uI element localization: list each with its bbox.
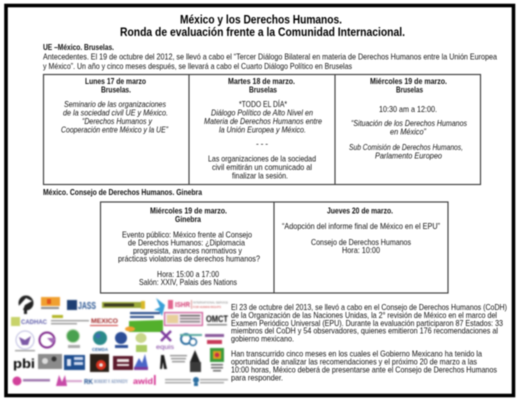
cell: Miércoles 19 de marzo Bruselas: “Situación de los Derechos Humanos xyxy=(351,118,468,128)
logo: JASS: JASS xyxy=(78,301,96,312)
cell: Miércoles 19 de marzo Ginebra: Miércoles 19 de marzo. xyxy=(150,206,227,216)
cell: Miércoles 19 de marzo Ginebra: progresista, avances normativos y xyxy=(133,246,243,256)
cell: Miércoles 19 de marzo Ginebra: de Derechos Humanos: ¿Diplomacia xyxy=(128,238,245,248)
cell: Martes 18 de marzo: *TODO EL DÍA* xyxy=(239,99,288,109)
text block: EPU summary: oportunidad de analizar las recomendaciones y el próximo 20 de marzo a las xyxy=(231,356,477,366)
logo: CIHE green seal xyxy=(66,330,80,348)
logo: CADHAC: CADHAC xyxy=(21,319,47,326)
logo: blue panel xyxy=(64,355,85,370)
logo: CADHAC xyxy=(11,317,47,326)
logo: Pooch xyxy=(41,297,60,309)
logo: ISHR xyxy=(168,300,228,309)
logo: blue circles xyxy=(180,334,202,346)
logo: green circle xyxy=(136,333,147,352)
logo: equis xyxy=(156,331,175,351)
cell: Miércoles 19 de marzo Ginebra: Salón: XXIV, Palais des Nations xyxy=(139,277,237,287)
cell: Miércoles 19 de marzo Bruselas: Parlamento Europeo xyxy=(375,150,442,160)
logo: Robert F. Kennedy: ROBERT F. KENNEDY xyxy=(94,380,128,385)
cell: Miércoles 19 de marzo Bruselas: en México” xyxy=(390,126,427,136)
logo: magenta crescent xyxy=(40,332,56,348)
logo: CEMDA: CEMDA xyxy=(92,347,109,352)
cell: Martes 18 de marzo: Martes 18 de marzo. xyxy=(228,76,295,86)
cell: Lunes 17 de marzo: Cooperación entre México y la UE” xyxy=(61,124,169,134)
text block: EPU summary: Han transcurrido cinco meses en los cuales el Gobierno Mexicano ha tenido la xyxy=(231,348,482,358)
logo: magenta wave xyxy=(56,375,82,386)
cell: Miércoles 19 de marzo Bruselas: Miércoles 19 de marzo. xyxy=(370,76,447,86)
logo: globe and dove xyxy=(17,296,34,314)
logo: pink mujeres xyxy=(12,376,50,386)
logo: OMCT: OMCT xyxy=(206,313,228,324)
logo: blue circle xyxy=(115,332,128,348)
logo: JASS xyxy=(67,300,96,312)
logo: Robert F. Kennedy: RK xyxy=(84,379,93,386)
cell: Miércoles 19 de marzo Ginebra: Ginebra xyxy=(175,214,201,224)
logo: Robert F. Kennedy xyxy=(84,379,128,386)
cell: Miércoles 19 de marzo Ginebra xyxy=(118,206,260,287)
cell: Martes 18 de marzo: Las organizaciones de la sociedad xyxy=(208,154,316,164)
logo: green patterned box xyxy=(210,348,224,372)
logo: pink red text xyxy=(205,334,224,344)
logo: CEMDA xyxy=(92,331,109,352)
cell: Martes 18 de marzo xyxy=(204,76,322,180)
cell: Martes 18 de marzo: Diálogo Político de Alto Nivel en xyxy=(211,108,313,118)
logo: pink framed box xyxy=(164,312,202,326)
title xyxy=(120,12,405,39)
cell: Martes 18 de marzo: Materia de Derechos Humanos entre xyxy=(204,116,322,126)
logo: yellow-green institute xyxy=(51,315,89,324)
cell: Martes 18 de marzo: civil emitirán un comunicado al xyxy=(212,162,312,172)
logo: equis: equis xyxy=(156,344,175,351)
section: UE-México background text xyxy=(43,42,497,71)
cell: Miércoles 19 de marzo Bruselas xyxy=(349,76,468,160)
logo: ISHR: ISHR xyxy=(175,302,190,309)
logo: blue bird xyxy=(154,298,165,316)
cell: Miércoles 19 de marzo Bruselas: Sub Comisión de Derechos Humanos, xyxy=(349,142,463,152)
cell: Miércoles 19 de marzo Ginebra: Hora: 15:00 a 17:00 xyxy=(157,269,219,279)
cell: Lunes 17 de marzo: de la sociedad civil UE y México. xyxy=(63,108,168,118)
cell: Jueves 20 de marzo xyxy=(282,206,440,255)
logo: awid: awid xyxy=(133,376,153,386)
cell: Miércoles 19 de marzo Ginebra: prácticas violatorias de derechos humanos? xyxy=(118,254,260,264)
section heading: Ginebra: México. Consejo de Derechos Humanos. Ginebra xyxy=(43,187,202,197)
logo: black triangle xyxy=(190,350,201,372)
table: Bruselas agenda xyxy=(44,74,480,184)
cell: Jueves 20 de marzo: Jueves 20 de marzo. xyxy=(327,206,393,216)
cell: Miércoles 19 de marzo Bruselas: Bruselas xyxy=(396,84,423,94)
logo: dark panel with red circle xyxy=(90,354,109,372)
cell: Lunes 17 de marzo: “Derechos Humanos y xyxy=(82,116,153,126)
logo: ISHR: FOR HUMAN RIGHTS xyxy=(193,305,221,309)
cell: Martes 18 de marzo: Bruselas xyxy=(249,84,277,94)
cell: Jueves 20 de marzo: Consejo de Derechos Humanos xyxy=(311,237,411,247)
logo: Fr. Francisco de Vitoria xyxy=(125,312,163,332)
section: UE-México background text: UE –México. Bruselas. xyxy=(43,42,114,52)
text block: EPU summary: para responder. xyxy=(231,372,283,382)
cell: Martes 18 de marzo: - - - xyxy=(256,138,268,148)
logo: dark red DE xyxy=(113,356,133,370)
text block: EPU summary xyxy=(231,302,507,382)
section: UE-México background text: y México”. Un año y cinco meses después, se llevará a cabo el Cuarto Diálogo Político en Bruselas xyxy=(43,61,352,71)
cell: Martes 18 de marzo: finalizar la sesión. xyxy=(232,170,288,180)
cell: Lunes 17 de marzo xyxy=(61,76,169,134)
title: México y los Derechos Humanos. xyxy=(180,12,342,26)
logo: ISHR: INTERNATIONAL SERVICE xyxy=(193,300,228,304)
cell: Miércoles 19 de marzo Bruselas: 10:30 am a 12:00. xyxy=(379,104,437,114)
logo wall: supporting organisations xyxy=(11,296,228,386)
cell: Lunes 17 de marzo: Seminario de las organizaciones xyxy=(64,99,167,109)
logo: black figure xyxy=(160,355,187,369)
cell: Miércoles 19 de marzo Ginebra: Evento público: México frente al Consejo xyxy=(122,230,252,240)
title: Ronda de evaluación frente a la Comunidad Internacional. xyxy=(120,25,405,39)
logo: MEXICO: MEXICO xyxy=(91,318,118,325)
cell: Jueves 20 de marzo: Hora: 10:00 xyxy=(342,245,380,255)
text block: EPU summary: gobierno mexicano. xyxy=(231,334,294,344)
logo: pbi: pbi xyxy=(13,357,35,371)
logo: grey photo xyxy=(38,354,62,369)
table: Ginebra agenda xyxy=(100,202,448,293)
logo: green and yellow lettering xyxy=(102,301,145,309)
cell: Martes 18 de marzo: la Unión Europea y México. xyxy=(219,124,306,134)
logo: purple circle bird xyxy=(15,331,35,351)
logo: grey and blue institute xyxy=(165,377,228,386)
logo: blue purple figures xyxy=(134,354,148,370)
cell: Jueves 20 de marzo: “Adopción del informe final de México en el EPU” xyxy=(282,221,440,231)
cell: Lunes 17 de marzo: Bruselas. xyxy=(101,84,131,94)
cell: Lunes 17 de marzo: Lunes 17 de marzo xyxy=(85,76,146,86)
